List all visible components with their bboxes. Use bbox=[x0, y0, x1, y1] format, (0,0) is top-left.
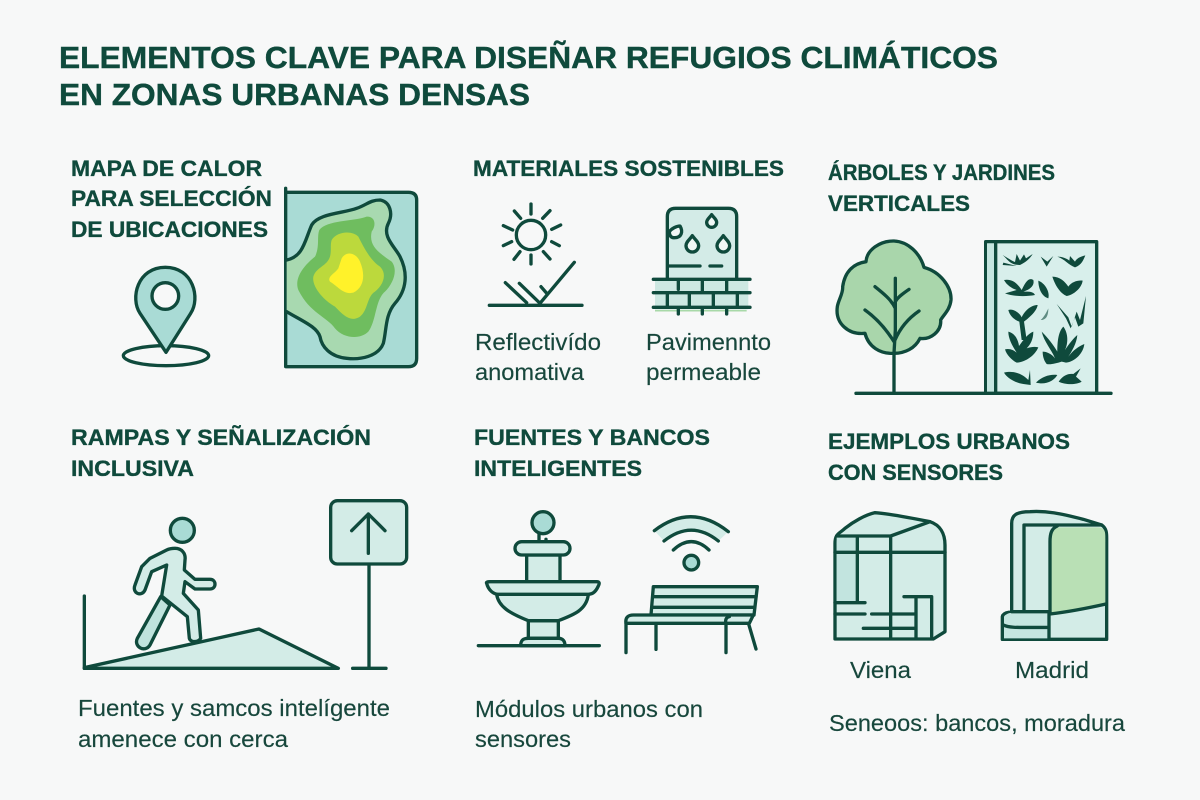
panel: ejemplos urbanos con sensores bbox=[828, 429, 1125, 736]
text: reflectividad bbox=[475, 329, 601, 385]
text: pavimento: permeable bbox=[646, 359, 761, 385]
heat map bbox=[286, 188, 417, 367]
text: fuentes y samcos bbox=[78, 695, 390, 752]
text: reflectividad: Reflectivído bbox=[475, 329, 601, 355]
icon: sun reflecting off a surface bbox=[489, 204, 582, 305]
heading: árboles: VERTICALES bbox=[828, 191, 970, 216]
panel: materiales sostenibles bbox=[473, 156, 784, 385]
heading: árboles bbox=[828, 160, 1055, 216]
heading: mapa de calor: DE UBICACIONES bbox=[71, 217, 268, 242]
icon: Viena shelter bbox=[835, 513, 945, 639]
text: módulos urbanos: sensores bbox=[475, 726, 571, 752]
heading: materiales sostenibles: MATERIALES SOSTENIBLES bbox=[473, 156, 784, 181]
panel: mapa de calor bbox=[71, 156, 417, 367]
heading: rampas: INCLUSIVA bbox=[71, 456, 194, 481]
icon: Madrid shelter bbox=[1002, 511, 1107, 639]
icon: location pin bbox=[123, 267, 209, 366]
text: fuentes y samcos: amenece con cerca bbox=[78, 726, 288, 752]
panel: árboles y jardines verticales bbox=[828, 160, 1111, 393]
icon: vertical garden bbox=[856, 242, 1111, 393]
label: Viena: Viena bbox=[850, 657, 911, 683]
icon: tree bbox=[837, 241, 951, 392]
heading: ejemplos urbanos: CON SENSORES bbox=[828, 460, 1003, 485]
panel: rampas y señalización bbox=[71, 425, 407, 752]
icon: smart bench with wifi bbox=[626, 517, 757, 653]
title: ELEMENTOS CLAVE PARA DISEÑAR REFUGIOS CLIMÁTICOS bbox=[59, 40, 998, 75]
heading: rampas: RAMPAS Y SEÑALIZACIÓN bbox=[71, 425, 371, 450]
icon: ramp with walking person bbox=[84, 518, 338, 668]
text: reflectividad: anomativa bbox=[475, 359, 584, 385]
heading: fuentes y bancos bbox=[474, 425, 710, 481]
text: fuentes y samcos: Fuentes y samcos intelígente bbox=[78, 695, 390, 721]
icon: arrow sign bbox=[331, 501, 407, 668]
heading: mapa de calor: MAPA DE CALOR bbox=[71, 156, 262, 181]
heading: rampas bbox=[71, 425, 371, 481]
label: Madrid: Madrid bbox=[1015, 657, 1089, 683]
icon: fountain bbox=[478, 512, 599, 646]
title bbox=[59, 40, 998, 112]
panel: fuentes y bancos inteligentes bbox=[474, 425, 757, 752]
heading: mapa de calor: PARA SELECCIÓN bbox=[71, 186, 272, 211]
heading: fuentes y bancos: FUENTES Y BANCOS bbox=[474, 425, 710, 450]
heading: ejemplos urbanos bbox=[828, 429, 1070, 485]
text: pavimento: Pavimennto bbox=[646, 329, 771, 355]
heading: ejemplos urbanos: EJEMPLOS URBANOS bbox=[828, 429, 1070, 454]
heading: fuentes y bancos: INTELIGENTES bbox=[474, 456, 642, 481]
heading: mapa de calor bbox=[71, 156, 272, 242]
text: pavimento bbox=[646, 329, 771, 385]
heading: árboles: ÁRBOLES Y JARDINES bbox=[828, 160, 1055, 185]
title: EN ZONAS URBANAS DENSAS bbox=[59, 77, 530, 112]
text: sensores: Seneoos: bancos, moradura bbox=[829, 710, 1125, 736]
icon: permeable pavement bbox=[653, 208, 750, 314]
text: módulos urbanos bbox=[475, 696, 703, 752]
text: módulos urbanos: Módulos urbanos con bbox=[475, 696, 703, 722]
